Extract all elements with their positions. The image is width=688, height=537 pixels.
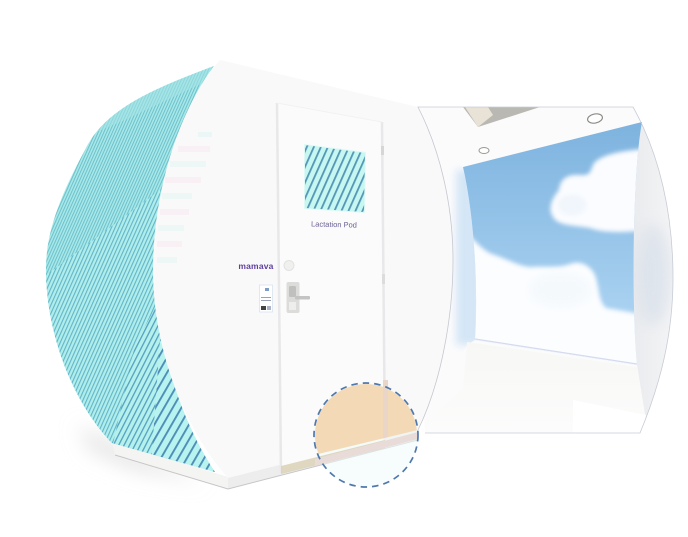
ground shadow (78, 425, 205, 482)
right wall blue tint (635, 225, 671, 325)
door hinge bottom (382, 274, 385, 284)
ceiling light left (479, 148, 489, 154)
deadbolt (284, 260, 294, 270)
sky mural (463, 122, 642, 365)
information placard (260, 285, 272, 312)
door window with stripes (304, 144, 366, 213)
floor box (645, 415, 646, 416)
callout: wood detail circle (281, 380, 418, 487)
panel: pod front (153, 60, 453, 478)
pod base (112, 428, 418, 489)
skylight (463, 107, 540, 127)
upper cloud shading (560, 197, 584, 213)
floor (467, 342, 470, 345)
interior outline (417, 107, 673, 433)
lower cloud shading (530, 274, 590, 306)
left wall blue tint (456, 170, 482, 345)
upper cloud (550, 148, 655, 232)
door (277, 103, 385, 473)
ceiling and walls base (410, 100, 680, 440)
sky bottom edge shadow (475, 339, 637, 364)
illustration: lactation pod (46, 66, 674, 490)
stripe ghosting on front (157, 132, 212, 263)
door hinge top (381, 146, 384, 155)
ceiling light right (587, 113, 603, 124)
door lock and handle (286, 282, 310, 313)
panel: striped side wall (46, 66, 215, 472)
sign: Lactation Pod: Lactation Pod (311, 219, 357, 230)
lower cloud (474, 236, 637, 365)
right wall (634, 125, 668, 417)
logo: mamava: mamava (238, 261, 274, 271)
panel: interior view (410, 100, 680, 440)
